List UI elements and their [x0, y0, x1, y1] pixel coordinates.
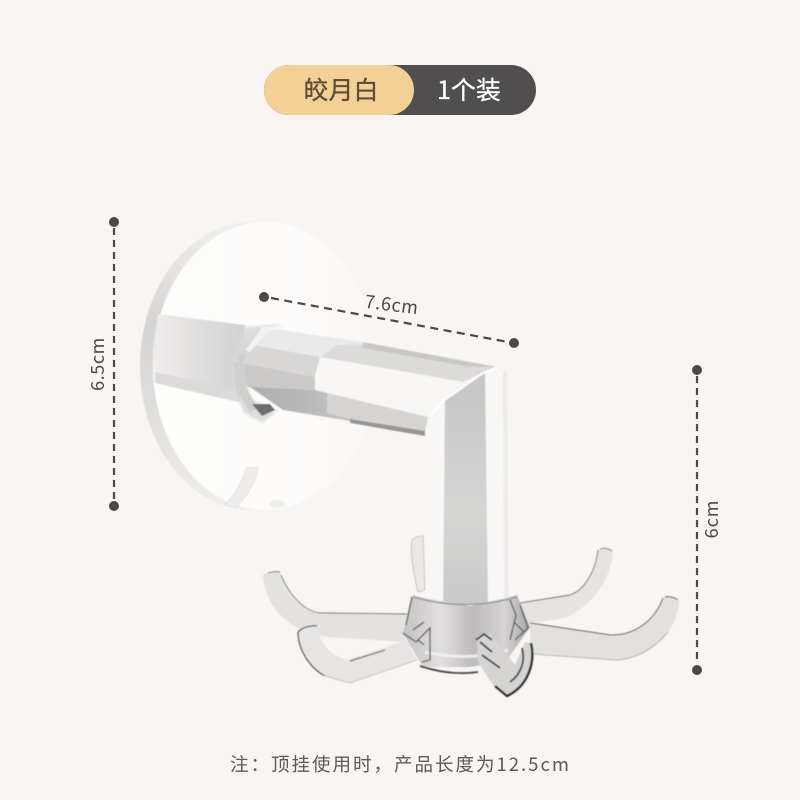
- dimension: arm length: [259, 288, 519, 348]
- pill label: colour: 皎月白: [303, 71, 379, 107]
- vertical column: [425, 367, 510, 606]
- dimension: disc diameter: [84, 217, 119, 511]
- collar: [232, 324, 284, 423]
- hook arm: back centre: [411, 536, 425, 592]
- horizontal arm: [243, 327, 497, 436]
- rotating base: [403, 595, 530, 673]
- rear tube: [153, 314, 245, 402]
- pill label: quantity: 1个装: [437, 71, 501, 107]
- disc mount: [140, 222, 377, 510]
- dimension: hook height: [692, 365, 724, 675]
- hook arm: front centre: [476, 633, 532, 696]
- option pill: [264, 65, 536, 115]
- label: 6.5cm: 6.5cm: [84, 337, 110, 391]
- product: rotating hook: [140, 222, 679, 696]
- label: 7.6cm: 7.6cm: [364, 288, 420, 320]
- hook arm: back left: [263, 571, 407, 642]
- label: 6cm: 6cm: [698, 500, 724, 538]
- hook arm: front right: [530, 597, 679, 660]
- footnote: 注：顶挂使用时，产品长度为12.5cm: [230, 751, 571, 777]
- hook arm: front left: [298, 626, 417, 683]
- hook arm: back right: [520, 548, 613, 624]
